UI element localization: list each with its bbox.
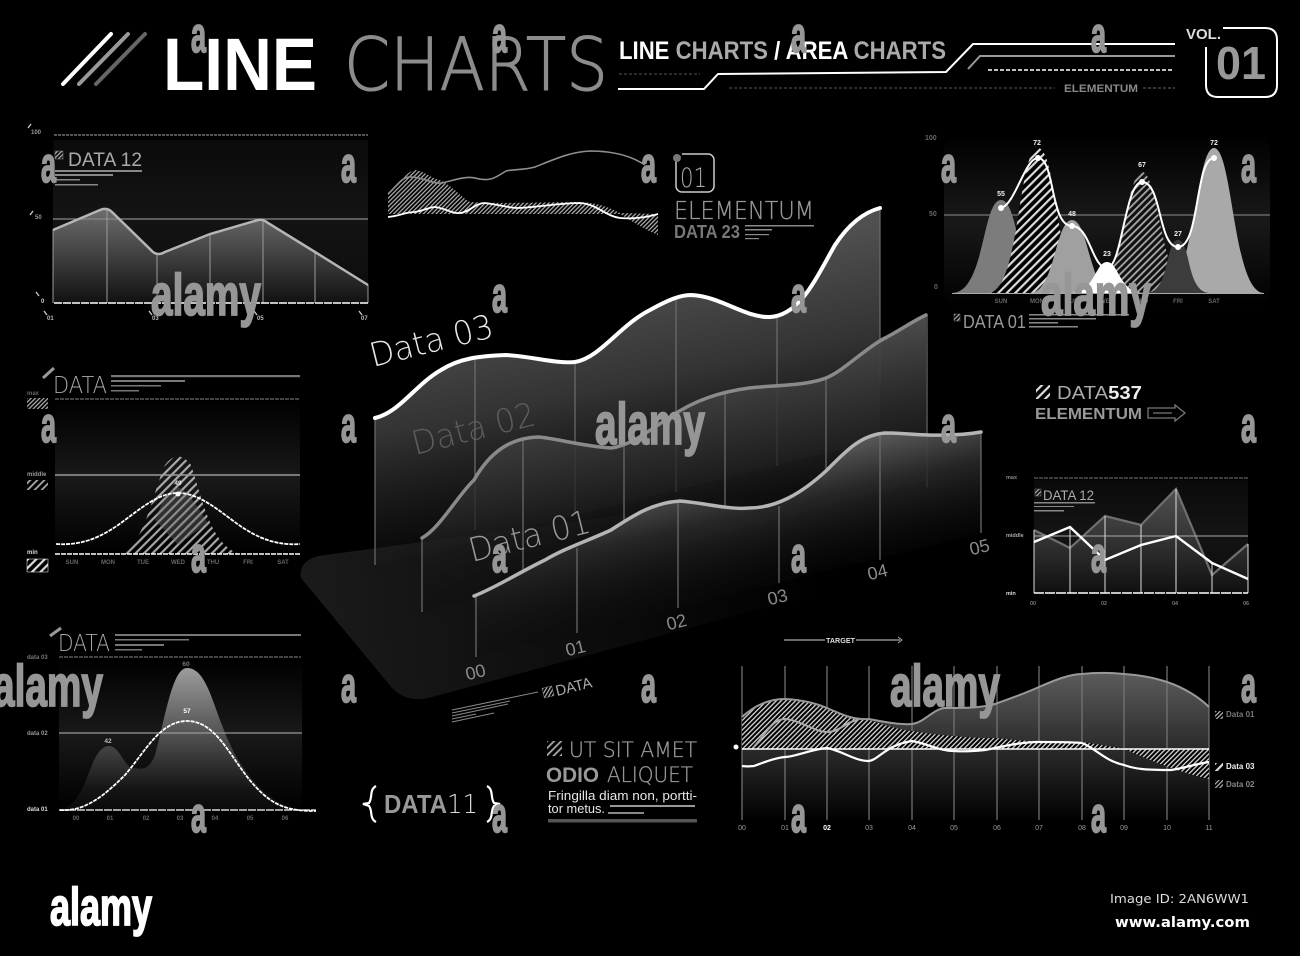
3d axis labels: 04 (865, 560, 890, 584)
text block: ut sit amet: ODIO (546, 764, 599, 787)
subtitle: LINE CHARTS / AREA CHARTS (619, 37, 946, 65)
panel: data gaussian chart: SAT (277, 560, 289, 566)
panel: data area with dashed bell chart: 05 (247, 816, 254, 822)
panel: data area with dashed bell chart: 03 (177, 816, 184, 822)
panel: data area with dashed bell chart: DATA (58, 631, 110, 657)
panel: data gaussian chart: max (27, 391, 40, 397)
watermarks: a (341, 137, 357, 193)
text block: ut sit amet: UT SIT AMET (569, 738, 697, 762)
legend: Data 01 (1226, 710, 1255, 719)
watermarks: alamy (1041, 263, 1151, 328)
panel: weekly bell curves chart (925, 135, 1270, 307)
footer logo: alamy (50, 878, 152, 937)
panel: data gaussian chart: DATA (53, 373, 107, 399)
panel: weekly bell curves chart: WED (1100, 299, 1115, 305)
panel: weekly bell curves chart: 72 (1210, 140, 1218, 147)
panel: data 12 area chart: 50 (35, 215, 42, 221)
watermarks: a (191, 527, 207, 583)
data11 tag: DATA (384, 789, 447, 819)
panel: data 12 area chart: 05 (257, 316, 264, 322)
data11 tag: 11 (447, 790, 478, 820)
panel: data gaussian chart: THU (207, 560, 219, 566)
panel: data 12 line chart: 04 (1172, 601, 1179, 607)
panel: data gaussian chart: TUE (137, 560, 149, 566)
panel: target multi-line chart: 02 (823, 825, 831, 832)
header rule lines (618, 44, 1175, 95)
panel: data gaussian chart: MON (101, 560, 115, 566)
legend: data 01: DATA 01 (963, 312, 1026, 332)
title (63, 23, 608, 108)
panel: target multi-line chart: 07 (1035, 825, 1043, 832)
3d axis labels: 00 (463, 660, 488, 684)
target arrow: TARGET (826, 638, 856, 645)
panel: data area with dashed bell chart: 04 (212, 816, 219, 822)
text block: ut sit amet: ALIQUET (607, 763, 693, 787)
area chart shape (53, 209, 368, 303)
panel: data 12 line chart: min (1006, 591, 1016, 597)
panel: weekly bell curves chart: FRI (1173, 299, 1183, 305)
watermarks: a (941, 397, 957, 453)
3d axis labels: 02 (664, 610, 689, 634)
panel: weekly bell curves chart: 0 (934, 284, 938, 291)
panel: weekly bell curves chart: TUE (1066, 299, 1078, 305)
panel: weekly bell curves chart: THU (1136, 299, 1148, 305)
watermarks: a (492, 527, 508, 583)
legend: data 01 (954, 312, 1129, 332)
watermarks: a (791, 527, 807, 583)
elementum badge: 01 (680, 163, 707, 194)
watermarks: a (341, 657, 357, 713)
footer image id: www.alamy.com (1115, 915, 1250, 931)
watermarks: a (1091, 527, 1107, 583)
panel: target multi-line chart: 11 (1205, 825, 1213, 832)
3d axis labels (463, 535, 992, 684)
panel: target multi-line chart: 05 (950, 825, 958, 832)
panel: weekly bell curves chart: 72 (1033, 140, 1041, 147)
3d data tag: DATA (554, 674, 594, 700)
panel: data 12 area chart: DATA 12 (68, 150, 142, 171)
panel: data area with dashed bell chart: 00 (73, 816, 80, 822)
text block: ut sit amet: tor metus. (548, 802, 605, 816)
panel: data 12 line chart (1006, 475, 1249, 607)
panel: weekly bell curves chart: MON (1030, 299, 1044, 305)
footer image id: Image ID: 2AN6WW1 (1110, 891, 1249, 906)
panel: data 12 line chart: max (1006, 475, 1018, 481)
data537 heading: ELEMENTUM (1035, 406, 1142, 423)
chart: 3d data 01 (465, 432, 981, 657)
panel: data gaussian chart (27, 368, 300, 572)
watermarks: a (1091, 787, 1107, 843)
panel: data 12 line chart: DATA 12 (1043, 487, 1094, 503)
watermarks: a (641, 657, 657, 713)
panel: data gaussian chart: 49 (174, 480, 182, 487)
panel: target multi-line chart: 09 (1120, 825, 1128, 832)
volume badge: 01 (1216, 37, 1266, 89)
panel: data 12 area chart (28, 124, 368, 322)
elementum badge: DATA 23 (674, 222, 740, 242)
panel: target multi-line chart: 08 (1078, 825, 1086, 832)
panel: data area with dashed bell chart: 42 (104, 738, 112, 745)
panel: target multi-line chart: 03 (865, 825, 873, 832)
watermarks: a (191, 7, 207, 63)
watermarks: a (41, 137, 57, 193)
panel: data 12 area chart: 100 (31, 130, 42, 136)
panel: target multi-line chart (734, 637, 1255, 832)
watermarks: a (1241, 397, 1257, 453)
chart: 3d data 02 (408, 315, 927, 612)
legend (1215, 710, 1255, 789)
panel: data gaussian chart: min (27, 550, 38, 556)
title: LINE (163, 23, 317, 106)
target arrow (784, 637, 902, 645)
icon: title slashes (63, 34, 145, 84)
panel: data area with dashed bell chart: 06 (282, 816, 289, 822)
watermarks: a (41, 397, 57, 453)
panel: target multi-line chart: 00 (738, 825, 746, 832)
panel: weekly bell curves chart: 67 (1138, 162, 1146, 169)
watermarks: alamy (151, 263, 261, 328)
panel: target multi-line chart: 10 (1163, 825, 1171, 832)
icon: outline arrow (1148, 405, 1185, 421)
3d axis labels: 05 (967, 535, 992, 559)
panel: data 12 area chart: 03 (152, 316, 159, 322)
panel: data area with dashed bell chart: 01 (107, 816, 114, 822)
panel: data 12 area chart: 0 (41, 299, 45, 305)
panel: data area with dashed bell chart: 02 (143, 816, 150, 822)
panel: target multi-line chart: 04 (908, 825, 916, 832)
panel: data 12 area chart: 01 (47, 316, 54, 322)
watermarks: a (1091, 7, 1107, 63)
header rule lines: ELEMENTUM (1064, 83, 1138, 95)
panel: data 12 line chart: 06 (1243, 601, 1249, 607)
data537 heading (1035, 383, 1185, 423)
3d axis labels: 03 (765, 585, 790, 609)
chart: 3d data 03 (366, 208, 880, 565)
watermarks: alamy (595, 392, 705, 457)
data537 heading: DATA 537 (1057, 383, 1142, 403)
panel: data 12 line chart: middle (1006, 533, 1024, 539)
panel: weekly bell curves chart: 50 (929, 211, 937, 218)
panel: weekly bell curves chart: SAT (1208, 299, 1220, 305)
3d data tag (452, 674, 594, 722)
chart: 3d data 03: Data 03 (366, 306, 497, 375)
elementum badge: ELEMENTUM (674, 196, 814, 225)
panel: data 12 line chart: 00 (1030, 601, 1036, 607)
panel: data gaussian chart: WED (171, 560, 186, 566)
panel: data area with dashed bell chart: 60 (182, 661, 190, 668)
panel: weekly bell curves chart: 48 (1068, 211, 1076, 218)
watermarks: a (492, 787, 508, 843)
panel: weekly bell curves chart: 23 (1103, 251, 1111, 258)
panel: data 12 line chart: 02 (1101, 601, 1107, 607)
panel: data area with dashed bell chart: data 03 (27, 655, 48, 661)
panel: data gaussian chart: SUN (66, 560, 78, 566)
3d axis labels: 01 (563, 636, 588, 660)
panel: weekly bell curves chart: 100 (925, 135, 937, 142)
legend: Data 03 (1226, 762, 1255, 771)
area shape (60, 668, 302, 810)
panel: data area with dashed bell chart (27, 628, 316, 822)
footer image id (1110, 891, 1250, 931)
panel: data gaussian chart: middle (27, 472, 47, 478)
data11 tag (363, 786, 500, 822)
panel: data area with dashed bell chart: data 01 (27, 807, 48, 813)
watermarks: a (1241, 137, 1257, 193)
text block: ut sit amet (546, 738, 697, 822)
watermarks: a (1241, 657, 1257, 713)
watermarks: a (941, 137, 957, 193)
panel: weekly bell curves chart: 55 (997, 191, 1005, 198)
watermarks: a (492, 267, 508, 323)
panel: data 12 area chart: 07 (361, 316, 368, 322)
title: CHARTS (344, 23, 608, 108)
panel: weekly bell curves chart: 27 (1174, 231, 1182, 238)
panel: data gaussian chart: FRI (243, 560, 253, 566)
panel: small hatched sparkline (388, 151, 658, 235)
elementum badge (672, 150, 814, 242)
watermarks: a (492, 7, 508, 63)
watermarks: a (191, 787, 207, 843)
panel: target multi-line chart: 06 (993, 825, 1001, 832)
watermarks: a (791, 7, 807, 63)
panel: 3d platform (301, 470, 1000, 699)
watermarks: a (791, 787, 807, 843)
panel: data area with dashed bell chart: data 02 (27, 731, 48, 737)
watermarks: a (791, 267, 807, 323)
panel: data area with dashed bell chart: 57 (183, 708, 191, 715)
volume badge: VOL. (1186, 26, 1221, 43)
panel: target multi-line chart: 01 (781, 825, 789, 832)
legend: Data 02 (1226, 780, 1255, 789)
chart: 3d data 01: Data 01 (465, 502, 594, 570)
watermarks: a (641, 137, 657, 193)
text block: ut sit amet: Fringilla diam non, portti- (548, 789, 697, 803)
volume badge (1186, 26, 1277, 97)
watermarks: alamy (890, 654, 1000, 719)
watermarks: a (341, 397, 357, 453)
chart: 3d data 02: Data 02 (408, 394, 539, 463)
panel: weekly bell curves chart: SUN (995, 299, 1007, 305)
